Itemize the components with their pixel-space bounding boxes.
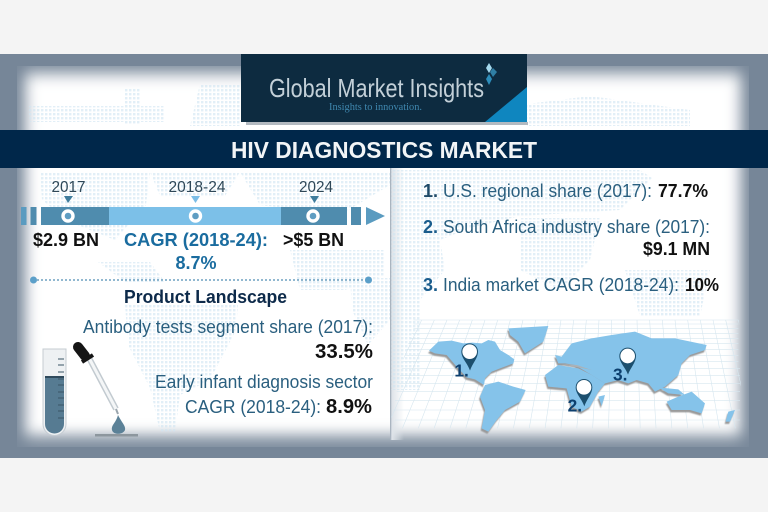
early infant cagr: CAGR (2018-24): [185,397,321,417]
2017 value: $2.9 BN [33,230,99,250]
item 3: India market CAGR (2018-24): [443,275,679,295]
timeline bar [21,207,385,225]
item 2: South Africa industry share (2017): [443,217,710,237]
year labels [52,179,333,196]
item 3: 3. [423,275,438,295]
world map [391,320,741,434]
item 2: $9.1 MN [643,239,710,259]
2024 value: >$5 BN [283,230,344,250]
background frame [0,54,768,458]
item 1: 1. [423,181,438,201]
map grid [391,320,741,428]
early infant value: 8.9% [326,395,372,418]
title band [0,130,768,168]
icon: test tube [43,349,66,436]
CAGR value: CAGR (2018-24): [124,230,268,250]
dotted world map background [28,84,710,432]
item 1: 77.7% [658,181,708,201]
year labels: 2018-24 [168,179,226,196]
pin labels [454,361,627,416]
pin 2 [576,379,592,406]
panel: white backdrop [17,66,749,447]
logo name: Global Market Insights [269,73,484,103]
mediterranean [562,364,592,370]
year labels: 2017 [52,179,86,196]
pin labels: 2. [568,396,582,416]
item 1: U.S. regional share (2017): [443,181,652,201]
early infant text: Early infant diagnosis sector [155,372,373,392]
logo corner triangle [485,87,527,122]
product landscape [83,287,373,418]
antibody text: Antibody tests segment share (2017): [83,317,373,337]
item 2: 2. [423,217,438,237]
regional shares [423,181,719,295]
panel divider shadow [390,168,408,440]
item 2 [423,217,710,259]
year labels: 2024 [299,179,333,196]
logo bottom shadow [246,122,528,125]
heading: Product Landscape [124,287,287,307]
title: HIV DIAGNOSTICS MARKET [231,137,537,163]
continents [429,326,735,432]
logo tagline: Insights to innovation. [329,102,422,113]
dotted divider [30,276,372,284]
panel: logo [241,54,527,122]
infographic page [0,54,768,458]
pin 1 [461,343,478,371]
logo diamonds [486,63,497,85]
item 3: 10% [685,275,719,295]
pin labels: 3. [613,365,627,385]
drop [112,415,125,434]
timeline [21,179,385,273]
pin 3 [619,348,636,375]
icon: dropper [78,347,138,436]
antibody value: 33.5% [315,340,373,363]
year markers [64,196,319,203]
timeline nodes [63,211,318,221]
pin labels: 1. [454,361,469,381]
CAGR percent: 8.7% [175,253,217,273]
dish [95,434,138,436]
